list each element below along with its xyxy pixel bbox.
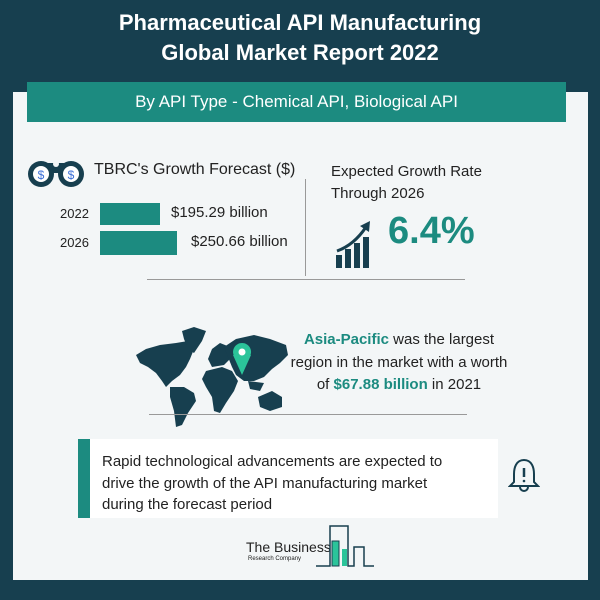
- bar 2026: [60, 231, 288, 255]
- stat: 6.4%: 6.4%: [388, 210, 475, 252]
- text: growth rate label: [331, 163, 482, 202]
- callout: driver: [78, 439, 498, 518]
- icon: world map: [136, 327, 288, 427]
- logo: [246, 525, 374, 567]
- icon: binoculars: $: [68, 168, 75, 182]
- title: Global Market Report 2022: [161, 40, 439, 65]
- bar 2026: $250.66 billion: [191, 233, 288, 250]
- title: Pharmaceutical API Manufacturing: [119, 10, 481, 35]
- icon: binoculars: $: [38, 168, 45, 182]
- bar 2022: 2022: [60, 206, 89, 221]
- logo: Research Company: [248, 556, 301, 562]
- banner: By API Type - Chemical API, Biological API: [135, 92, 458, 111]
- title: [119, 10, 481, 65]
- logo: The Business: [246, 539, 331, 555]
- bar 2022: [60, 203, 268, 225]
- icon: binoculars: [28, 161, 84, 187]
- bar 2026: 2026: [60, 235, 89, 250]
- heading: growth forecast: TBRC's Growth Forecast ($): [94, 161, 295, 178]
- icon: bell: [508, 459, 540, 492]
- panel: main: [13, 92, 588, 580]
- callout: driver: during the forecast period: [102, 496, 272, 513]
- text: growth rate label: Expected Growth Rate: [331, 163, 482, 180]
- callout: driver: drive the growth of the API manufacturing market: [102, 474, 427, 492]
- bar 2022: $195.29 billion: [171, 204, 268, 221]
- text: growth rate label: Through 2026: [331, 185, 424, 202]
- callout: driver: Rapid technological advancements are expected to: [102, 453, 442, 470]
- banner: [27, 82, 566, 122]
- bar chart: [60, 203, 288, 255]
- text: Asia-Pacific: Asia-Pacific was the largest region in the market with a worth of $67.88 billion in 2021: [291, 331, 507, 393]
- icon: growth chart: [336, 221, 370, 268]
